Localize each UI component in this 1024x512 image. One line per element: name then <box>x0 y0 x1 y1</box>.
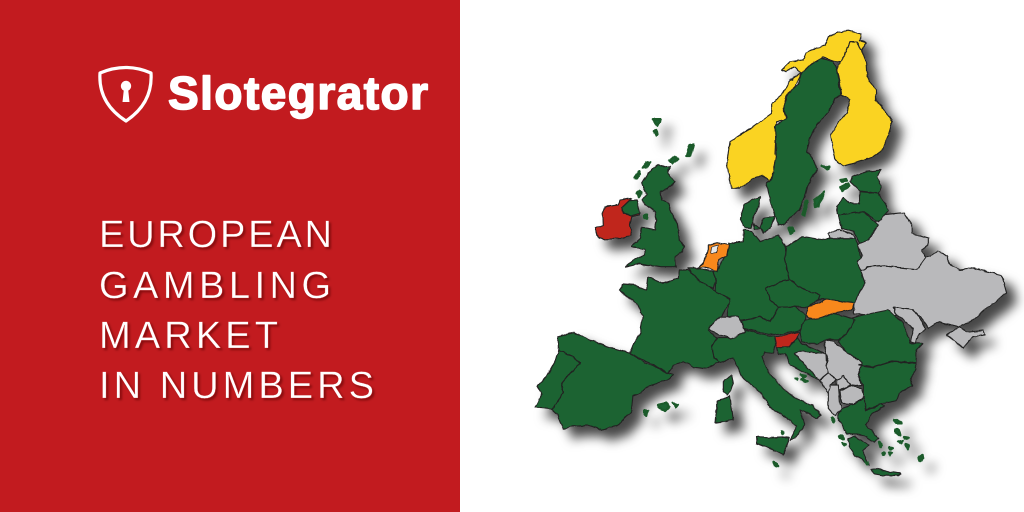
Portugal <box>535 350 580 409</box>
title: IN NUMBERS <box>99 365 374 407</box>
Germany <box>713 230 789 322</box>
map region: British Isles <box>595 162 685 267</box>
Balearic islands, Corsica and Sardinia <box>645 375 733 423</box>
Sicily <box>756 437 789 455</box>
panel: red left background <box>0 0 460 512</box>
Finland <box>831 42 892 166</box>
map region: Central and Eastern Europe <box>688 213 1007 348</box>
Moldova <box>893 307 925 343</box>
Greece <box>837 397 884 465</box>
Adriatic, Aegean and Mediterranean small islands <box>774 375 923 467</box>
Norway <box>727 31 867 188</box>
Sweden <box>766 58 841 225</box>
icon: shield with keyhole <box>100 68 151 121</box>
Estonia <box>850 170 882 193</box>
map region: Scandinavia and British north <box>653 31 892 225</box>
Northern Ireland <box>622 200 640 216</box>
France <box>619 270 731 373</box>
Italy <box>712 330 821 440</box>
Orkney and Shetland islands <box>670 145 693 163</box>
Croatia <box>777 338 826 380</box>
Bulgaria <box>858 362 917 410</box>
Switzerland <box>708 317 746 338</box>
Poland <box>785 237 865 303</box>
Faroe islands <box>653 120 661 135</box>
map of Europe <box>535 31 1007 476</box>
map region: Iberia and France <box>535 270 733 430</box>
Ireland <box>595 198 639 239</box>
Baltic islands <box>789 166 849 233</box>
Slovakia <box>806 299 854 320</box>
Bosnia <box>795 352 828 380</box>
Belarus <box>857 213 928 272</box>
Spain <box>552 333 673 430</box>
Crete <box>871 469 900 476</box>
Czech Republic <box>766 280 820 307</box>
Kosovo <box>837 376 851 390</box>
Great Britain <box>625 164 685 267</box>
Lithuania <box>838 212 878 243</box>
logo: Slotegrator <box>100 67 428 121</box>
Crimea <box>947 327 985 348</box>
North Macedonia <box>840 386 864 404</box>
Denmark <box>740 197 774 233</box>
Romania <box>838 310 923 367</box>
Latvia <box>837 192 889 222</box>
Slovenia <box>774 332 800 347</box>
title: EUROPEAN <box>99 214 332 256</box>
map region: Balkans and south <box>756 310 923 476</box>
Ukraine <box>853 252 1007 328</box>
Hungary <box>800 313 855 343</box>
Scottish islands <box>635 162 650 219</box>
title <box>99 214 374 407</box>
Netherlands <box>697 243 729 272</box>
Austria <box>742 307 806 335</box>
Serbia <box>824 340 862 386</box>
Albania <box>828 385 842 416</box>
Kaliningrad <box>828 229 855 238</box>
title: GAMBLING <box>99 265 331 307</box>
Montenegro <box>820 373 837 393</box>
map region: Denmark and Baltics <box>740 166 889 243</box>
Belgium <box>688 268 716 288</box>
title: MARKET <box>99 315 278 357</box>
logo wordmark: Slotegrator <box>168 67 428 119</box>
